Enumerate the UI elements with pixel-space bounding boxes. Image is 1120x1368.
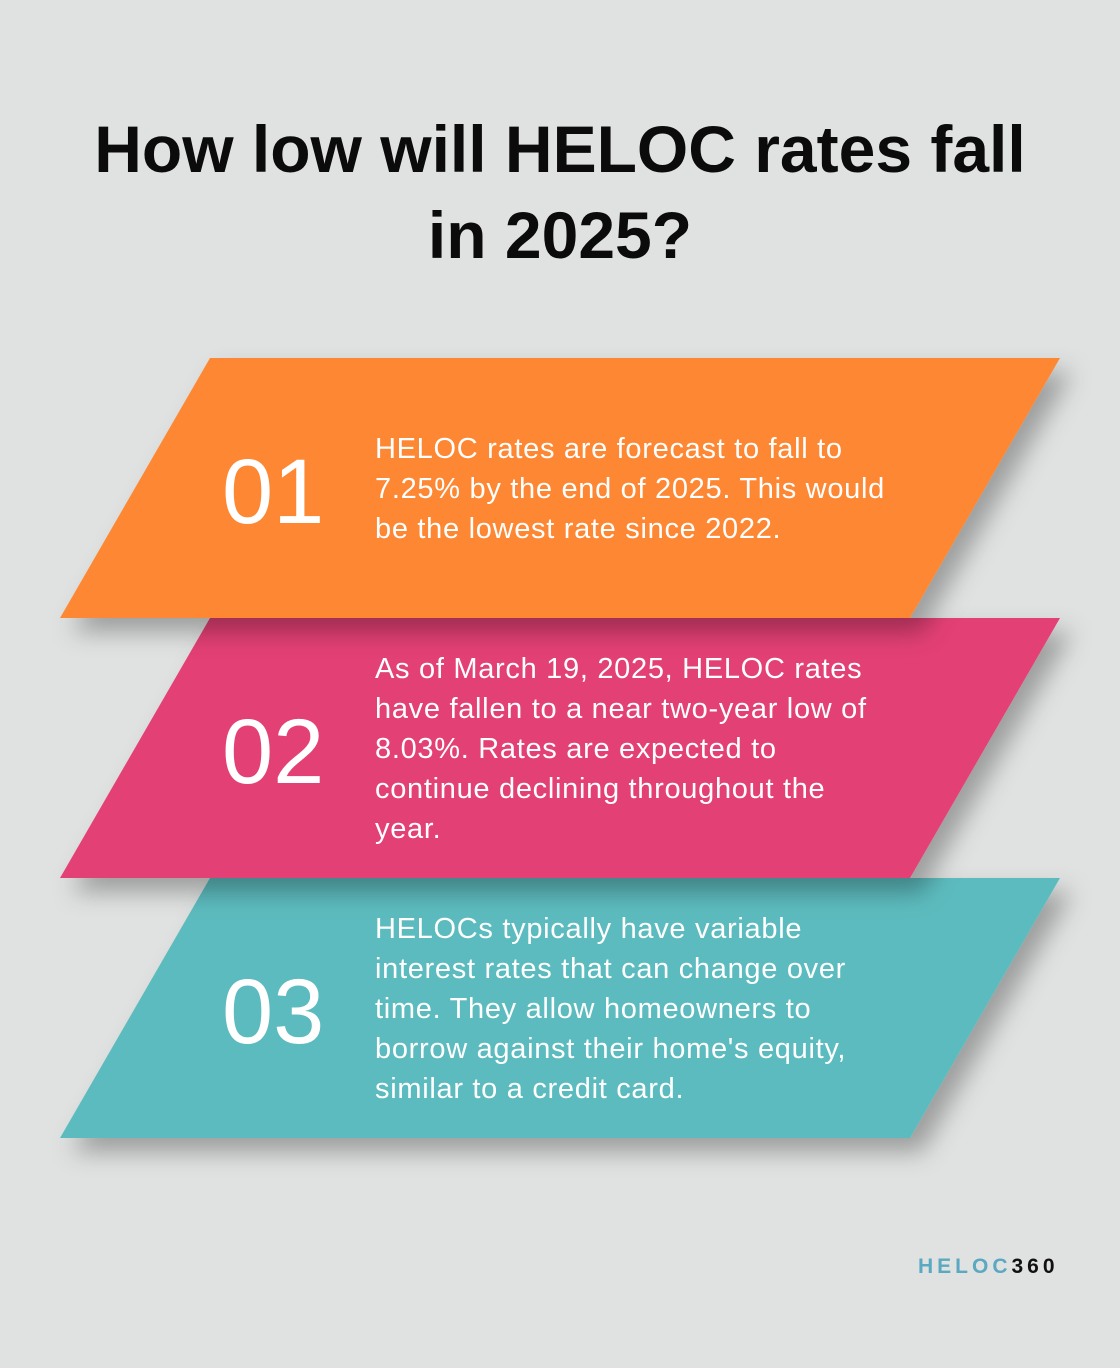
panel 1 text: HELOC rates are forecast to fall to <box>375 433 843 465</box>
panel 2 text: 8.03%. Rates are expected to <box>375 733 777 765</box>
panel 2 text: continue declining throughout the <box>375 773 825 805</box>
panel 3 text: time. They allow homeowners to <box>375 993 811 1025</box>
title: in 2025? <box>428 198 692 272</box>
panel 2 text: have fallen to a near two-year low of <box>375 693 867 725</box>
panel 3 text: similar to a credit card. <box>375 1073 684 1105</box>
logo: HELOC360 <box>918 1255 1059 1278</box>
panel 3 text: interest rates that can change over <box>375 953 846 985</box>
panel 2 number: 02 <box>222 701 324 803</box>
panel 1 shape <box>60 358 1060 618</box>
title: How low will HELOC rates fall <box>94 112 1026 186</box>
panel 2 text: As of March 19, 2025, HELOC rates <box>375 653 862 685</box>
panel 2 shape <box>60 618 1060 878</box>
panel 3 number: 03 <box>222 961 324 1063</box>
panel 1 text: 7.25% by the end of 2025. This would <box>375 473 885 505</box>
panel 3 text <box>375 913 846 1105</box>
panel 1 number: 01 <box>222 441 324 543</box>
panel 2 text: year. <box>375 813 441 845</box>
panel 2 text <box>375 653 867 845</box>
title <box>94 112 1026 272</box>
panel 1 text <box>375 433 885 545</box>
panel 1 text: be the lowest rate since 2022. <box>375 513 781 545</box>
panel 3 text: HELOCs typically have variable <box>375 913 802 945</box>
panel 3 shape <box>60 878 1060 1138</box>
panel 3 text: borrow against their home's equity, <box>375 1033 846 1065</box>
